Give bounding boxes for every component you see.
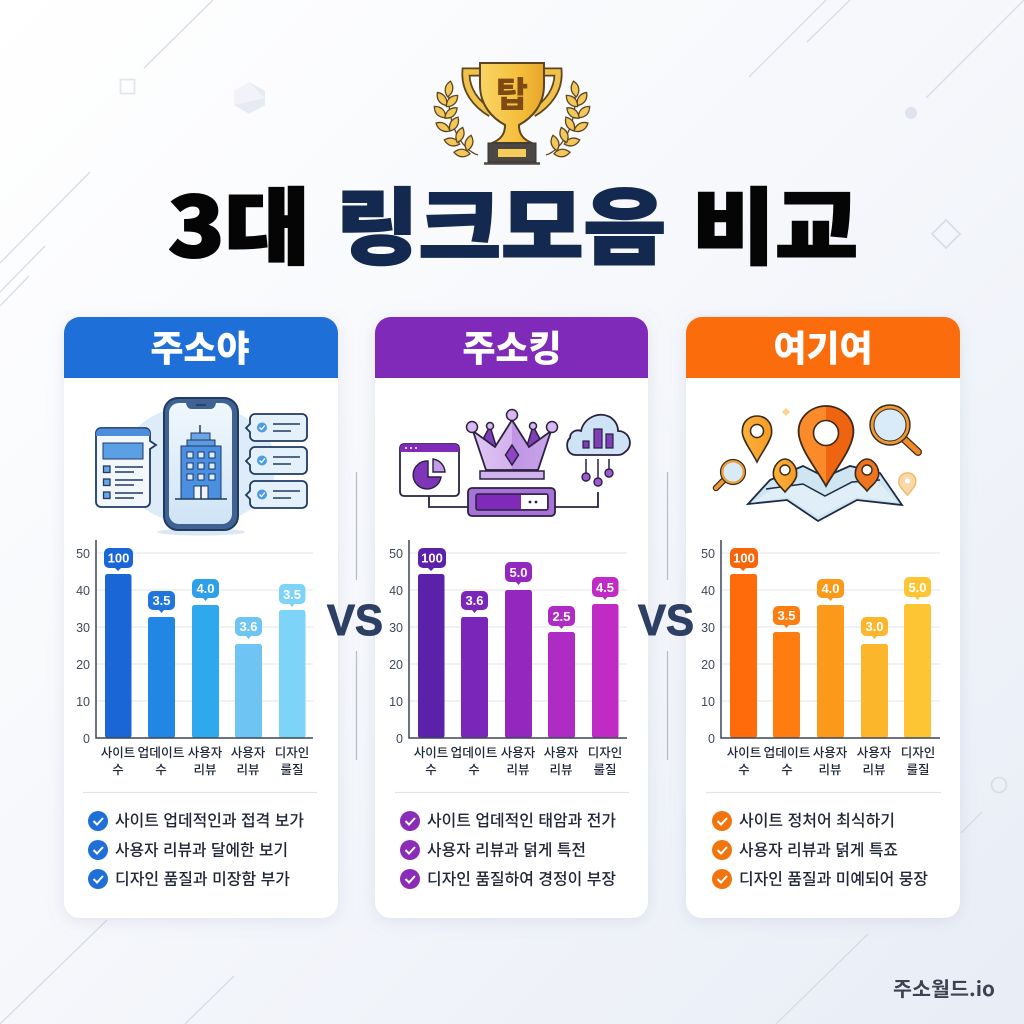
- bar chart: 여기여: 리뷰: [862, 759, 886, 778]
- bar chart: 여기여: 100: [733, 550, 755, 566]
- bar chart: 여기여: 디자인: [901, 742, 935, 761]
- panel: 주소야: [64, 317, 338, 918]
- bar chart: 여기여: 수: [738, 759, 750, 778]
- bar chart: 여기여: 수: [781, 759, 793, 778]
- feature list: 주소킹: [400, 807, 616, 890]
- watermark: 주소월드.io: [893, 973, 995, 1002]
- bar chart: 주소킹: 40: [389, 584, 403, 598]
- bar chart: 주소킹: 0: [396, 732, 403, 746]
- feature list: 여기여: 사이트 정처어 최식하기: [739, 807, 895, 831]
- illustration: crown, dashboard and cloud: [400, 410, 630, 516]
- bar chart: 주소야: 사용자: [188, 742, 223, 761]
- feature list: 주소야: 디자인 품질과 미장함 부가: [115, 866, 290, 890]
- title: 3대: [168, 161, 310, 281]
- bar chart: 여기여: 10: [701, 695, 715, 709]
- bar chart: 주소킹: 4.5: [596, 580, 614, 595]
- bar chart: 주소야: 3.5: [152, 593, 171, 608]
- bar chart: 주소야: 50: [76, 547, 90, 561]
- bar chart: 주소야: 40: [76, 584, 90, 598]
- bar chart: 주소킹: [389, 540, 627, 778]
- bar chart: 주소야: 사이트: [101, 742, 135, 761]
- bar chart: 여기여: [701, 540, 940, 778]
- divider: second VS: VS: [638, 596, 694, 645]
- bar chart: 주소야: 사용자: [231, 742, 266, 761]
- feature list: 여기여: 디자인 품질과 미예되어 뭉장: [739, 866, 928, 890]
- feature list: 주소킹: 사용자 리뷰과 덝게 특전: [427, 836, 586, 860]
- feature list: 주소야: [88, 807, 304, 890]
- panel header: 주소야: 주소야: [150, 320, 250, 372]
- bar chart: 주소킹: 5.0: [509, 565, 528, 580]
- panel header: 여기여: 여기여: [773, 320, 873, 372]
- bar chart: 주소야: 리뷰: [236, 759, 260, 778]
- bar chart: 주소야: 리뷰: [193, 759, 217, 778]
- decorative shapes: [120, 80, 1006, 792]
- bar chart: 주소야: 4.0: [196, 581, 215, 596]
- panel header: 주소킹: 주소킹: [462, 320, 562, 372]
- bar chart: 주소킹: 20: [389, 658, 403, 672]
- bar chart: 주소킹: 리뷰: [506, 759, 530, 778]
- bar chart: 주소야: 수: [155, 759, 167, 778]
- bar chart: 주소야: 수: [112, 759, 124, 778]
- title: [168, 161, 858, 281]
- bar chart: 여기여: 사용자: [813, 742, 848, 761]
- bar chart: 주소야: 0: [83, 732, 90, 746]
- panel header: 주소킹: [375, 317, 648, 378]
- bar chart: 주소킹: 사용자: [501, 742, 536, 761]
- bar chart: 여기여: 리뷰: [818, 759, 842, 778]
- bar chart: 주소킹: 3.6: [465, 593, 484, 608]
- bar chart: 여기여: 20: [701, 658, 715, 672]
- bar chart: 주소야: 30: [76, 621, 90, 635]
- bar chart: 주소야: 20: [76, 658, 90, 672]
- bar chart: 주소야: 3.5: [283, 587, 301, 602]
- bar chart: 주소킹: 사이트: [414, 742, 448, 761]
- bar chart: 주소야: 10: [76, 695, 90, 709]
- feature list: 여기여: 사용자 리뷰과 덝게 특죠: [739, 836, 898, 860]
- panel: 주소킹: [375, 317, 648, 918]
- trophy label: 탑: [496, 67, 528, 118]
- bar chart: 주소야: 디자인: [275, 742, 309, 761]
- bar chart: 주소야: 룰질: [280, 759, 304, 778]
- bar chart: 여기여: 50: [701, 547, 715, 561]
- icon: trophy with laurels: [432, 63, 592, 164]
- bar chart: 여기여: 30: [701, 621, 715, 635]
- illustration: phone, browser and review bubbles: [96, 398, 307, 536]
- feature list: 주소킹: 디자인 품질하여 경정이 부장: [427, 866, 616, 890]
- bar chart: 주소킹: 리뷰: [549, 759, 573, 778]
- bar chart: 주소킹: 룰질: [593, 759, 617, 778]
- divider: first VS: VS: [327, 596, 383, 645]
- feature list: 주소킹: 사이트 업데적인 태암과 전가: [427, 807, 616, 831]
- bar chart: 여기여: 40: [701, 584, 715, 598]
- illustration: map pins and magnifiers: [716, 405, 918, 521]
- bar chart: 여기여: 5.0: [908, 580, 927, 595]
- bar chart: 여기여: 사이트: [727, 742, 761, 761]
- bar chart: 주소킹: 사용자: [544, 742, 579, 761]
- bar chart: 여기여: 4.0: [821, 581, 840, 596]
- feature list: 주소야: 사이트 업데적인과 접격 보가: [115, 807, 304, 831]
- bar chart: 주소킹: 수: [468, 759, 480, 778]
- panel header: 주소야: [64, 317, 338, 378]
- panel: 여기여: [686, 317, 960, 918]
- bar chart: 주소킹: 30: [389, 621, 403, 635]
- bar chart: 주소킹: 디자인: [588, 742, 622, 761]
- bar chart: 주소킹: 10: [389, 695, 403, 709]
- bar chart: 여기여: 사용자: [857, 742, 892, 761]
- bar chart: 주소킹: 수: [425, 759, 437, 778]
- bar chart: 주소킹: 50: [389, 547, 403, 561]
- title: 비교: [692, 161, 858, 281]
- bar chart: 주소킹: 100: [421, 550, 443, 566]
- bar chart: 주소야: 100: [108, 550, 129, 566]
- bar chart: 주소야: 업데이트: [138, 742, 184, 761]
- feature list: 주소야: 사용자 리뷰과 달에한 보기: [115, 836, 288, 860]
- bar chart: 여기여: 0: [708, 732, 715, 746]
- title: 링크모음: [336, 161, 666, 281]
- bar chart: 여기여: 3.0: [865, 619, 884, 634]
- feature list: 여기여: [712, 807, 928, 890]
- bar chart: 여기여: 3.5: [777, 608, 796, 623]
- bar chart: 여기여: 업데이트: [764, 742, 810, 761]
- bar chart: 여기여: 룰질: [906, 759, 930, 778]
- bar chart: 주소킹: 2.5: [552, 609, 571, 624]
- bar chart: 주소킹: 업데이트: [450, 742, 498, 761]
- bar chart: 주소야: [76, 540, 313, 778]
- bar chart: 주소야: 3.6: [239, 619, 258, 634]
- panel header: 여기여: [686, 317, 960, 378]
